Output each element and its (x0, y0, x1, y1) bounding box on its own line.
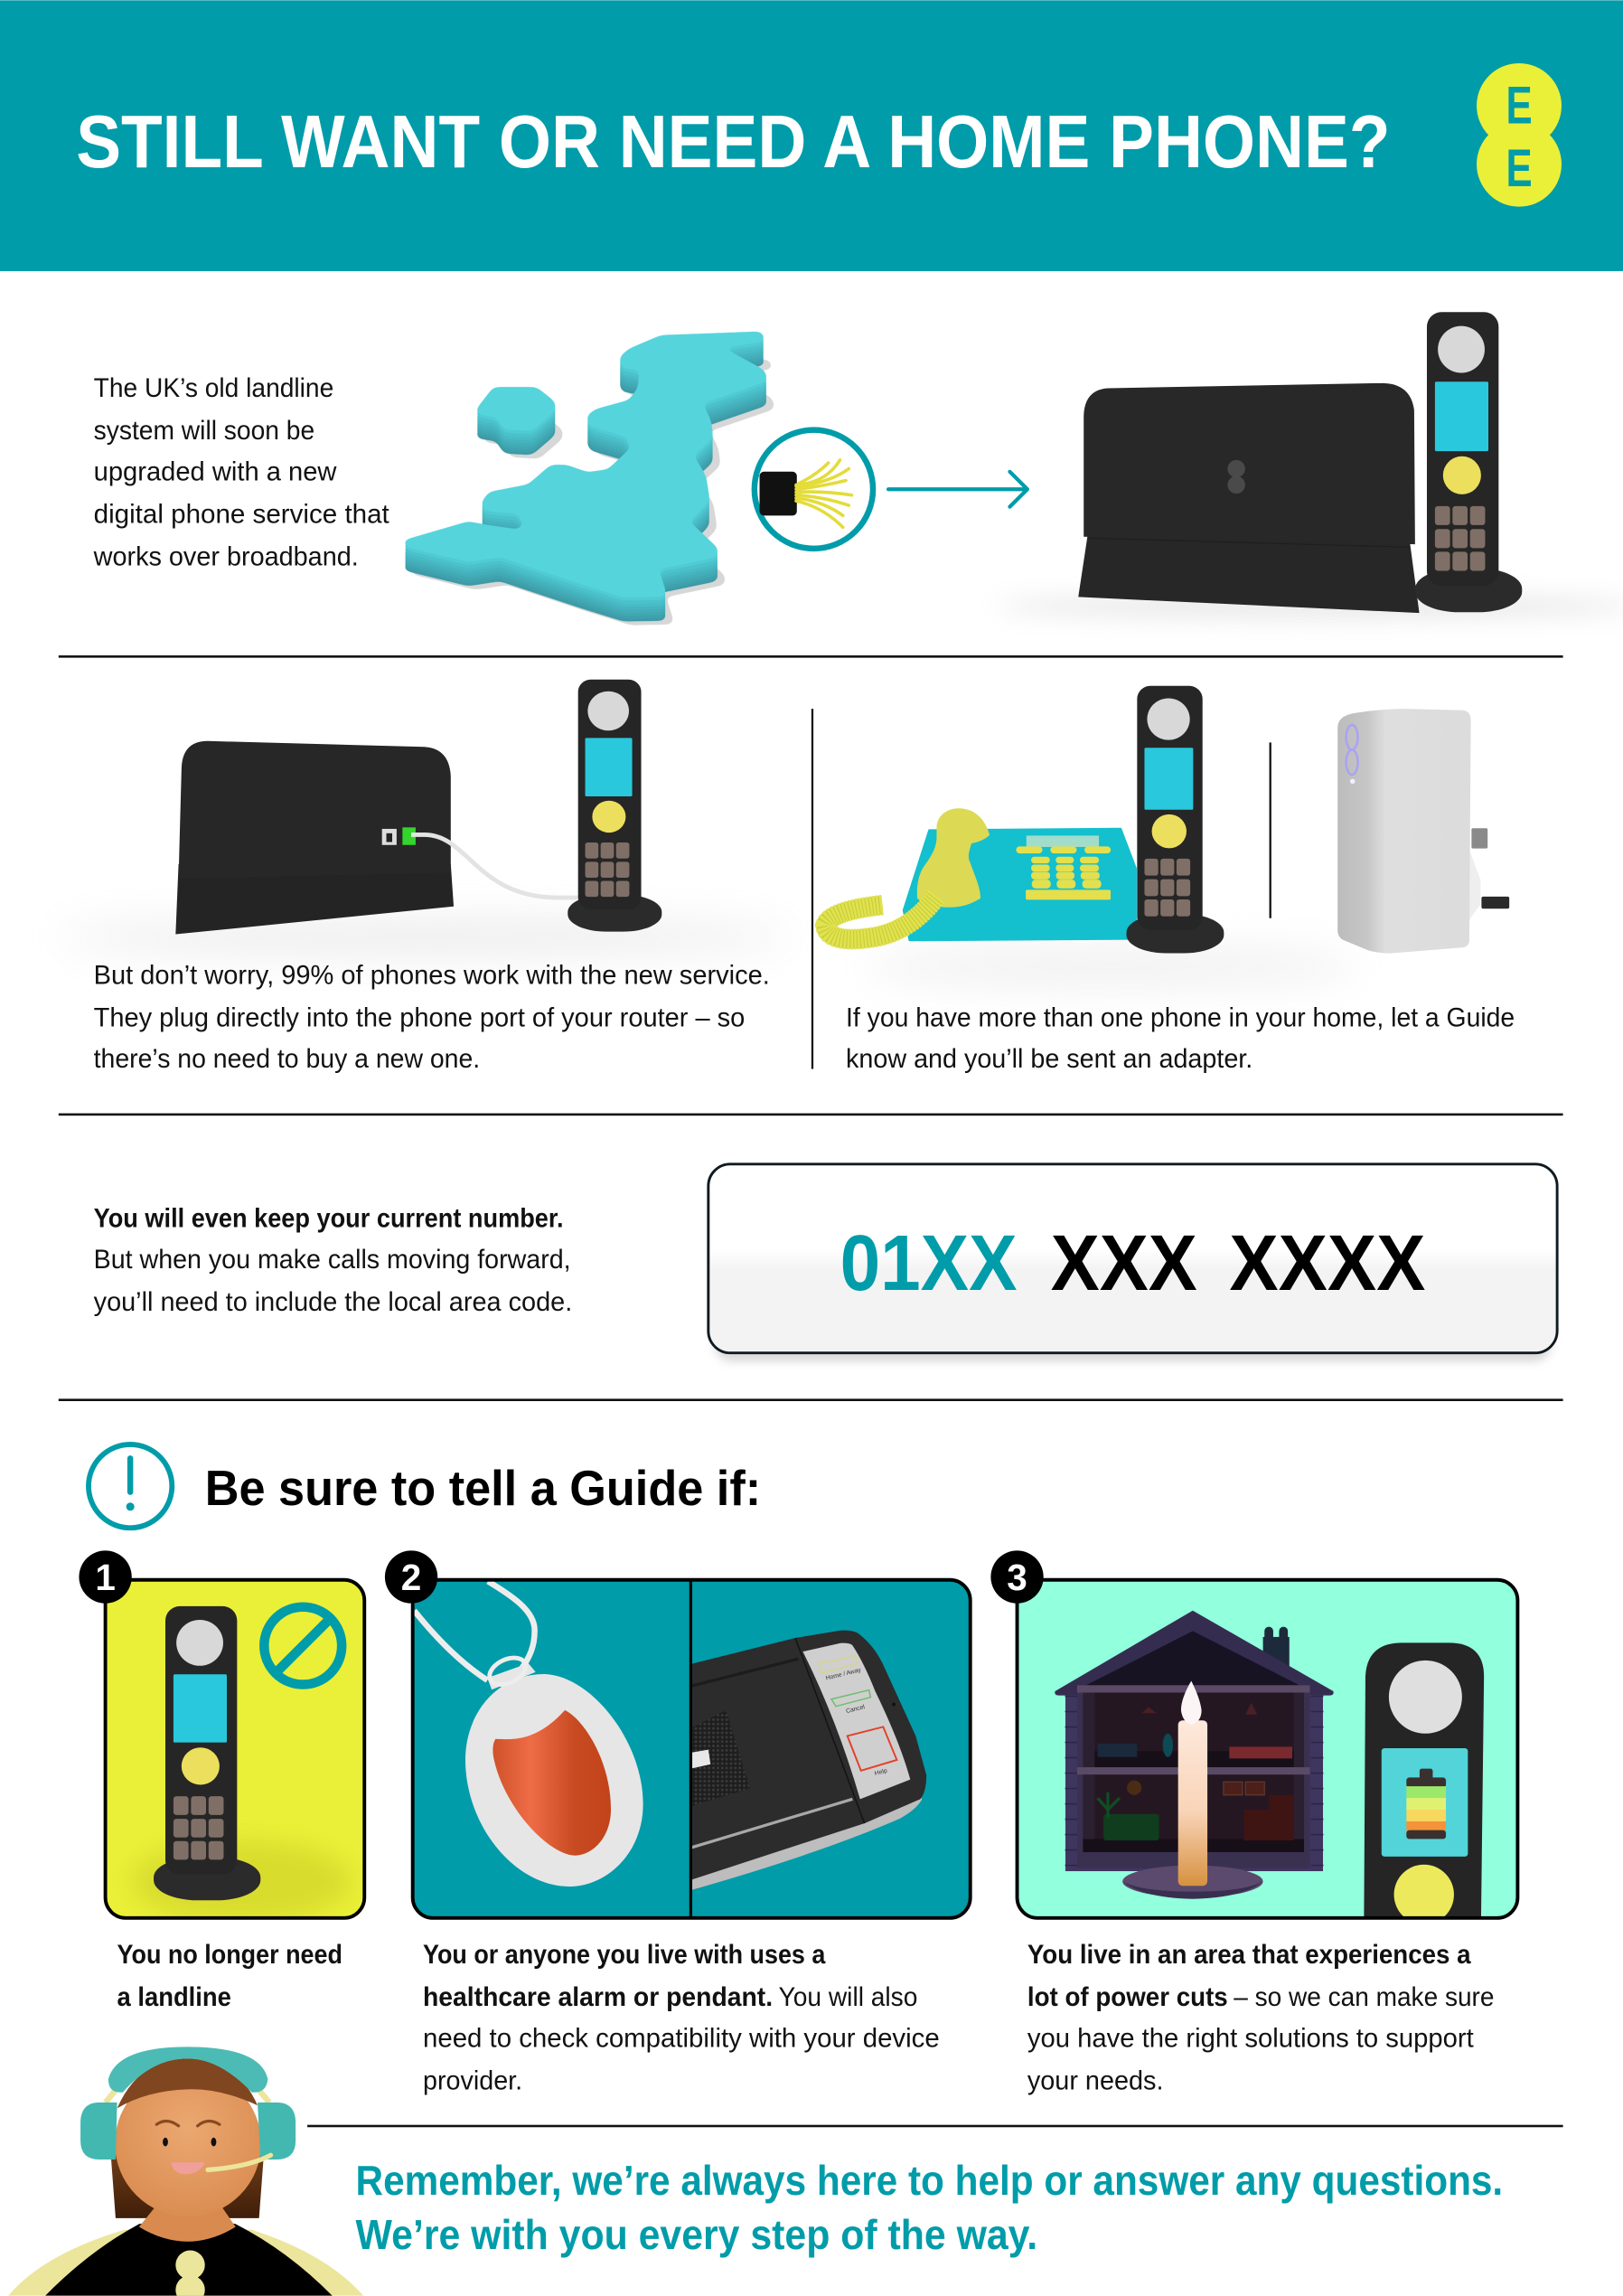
caption 3: You live in an area that experiences a (1027, 1940, 1471, 1970)
badge 1 (79, 1550, 132, 1604)
closing message: We’re with you every step of the way. (356, 2211, 1037, 2258)
big phone with battery (1364, 1642, 1484, 1924)
shirt logo (175, 2250, 205, 2296)
alarm device: Home / Away (825, 1667, 862, 1682)
adapter (1337, 709, 1509, 954)
router and phone (995, 312, 1623, 618)
microphone (208, 2155, 271, 2169)
panel: more than one phone (825, 686, 1515, 1074)
text block: phones work: They plug directly into the phone port of your router – so (94, 1003, 745, 1033)
text block: intro (93, 373, 389, 571)
panel: landline upgrade (93, 312, 1623, 624)
text block: adapter: know and you’ll be sent an adapter. (846, 1044, 1252, 1074)
phone (1127, 686, 1224, 954)
number box: XXXX (1229, 1219, 1425, 1307)
alarm device: Cancel (845, 1704, 866, 1715)
text block: adapter (846, 1003, 1515, 1074)
badge 1: 1 (95, 1557, 116, 1598)
candle (1122, 1680, 1263, 1899)
caption 3: – so we can make sure (1234, 1982, 1494, 2012)
text block: number: You will even keep your current number. (94, 1203, 563, 1233)
icon: exclamation (89, 1444, 172, 1528)
telephone (825, 808, 1136, 940)
icon: EE logo: E (1506, 76, 1533, 135)
caption 2: You will also (779, 1982, 917, 2012)
text block: phones work: But don’t worry, 99% of phones work with the new service. (94, 961, 770, 991)
headband (108, 2047, 267, 2093)
small divider (1270, 742, 1271, 918)
badge 2 (385, 1550, 437, 1604)
number box (708, 1164, 1557, 1361)
panel: phones work with new service (59, 680, 791, 1074)
text block: number: you’ll need to include the local area code. (94, 1287, 572, 1317)
divider (59, 655, 1563, 658)
face (116, 2089, 260, 2208)
caption 2 (423, 1940, 940, 2095)
caption 2: You or anyone you live with uses a (423, 1940, 826, 1970)
panel: keep your number (94, 1164, 1557, 1361)
vertical divider (812, 709, 813, 1069)
headset arms (103, 2090, 271, 2103)
text block: number: But when you make calls moving forward, (94, 1245, 571, 1275)
router with phone plugged in (59, 680, 791, 952)
neck (139, 2207, 236, 2242)
title: STILL WANT OR NEED A HOME PHONE? (76, 99, 1391, 183)
card 2: alarm or pendant (385, 1550, 971, 1918)
closing message (356, 2157, 1503, 2258)
caption 3: you have the right solutions to support (1027, 2023, 1475, 2053)
divider (307, 2125, 1563, 2127)
icon: EE logo (1477, 63, 1562, 207)
caption 3 (1027, 1940, 1494, 2095)
icon: no sign (264, 1607, 342, 1685)
section heading with alert icon (89, 1444, 761, 1528)
number box: 01XX (840, 1219, 1018, 1307)
alarm device (690, 1631, 926, 1890)
icon: UK map (402, 333, 774, 624)
icon: EE logo: E (1506, 139, 1533, 198)
hair top (117, 2058, 258, 2108)
divider (59, 1114, 1563, 1115)
text block: adapter: If you have more than one phone in your home, let a Guide (846, 1003, 1515, 1033)
shoulders (5, 2230, 366, 2296)
text block: intro: upgraded with a new (94, 457, 337, 487)
icon: fibre cable in circle (755, 430, 873, 549)
arrow (888, 472, 1027, 507)
icon: battery (1406, 1769, 1446, 1839)
card 3: power cuts (990, 1550, 1517, 1924)
alarm device: Help (874, 1768, 888, 1777)
text block: intro: digital phone service that (94, 499, 389, 529)
character: guide with headset (5, 2047, 366, 2296)
heading: Be sure to tell a Guide if: (205, 1460, 761, 1516)
house (1055, 1611, 1334, 1871)
text block: intro: The UK’s old landline (94, 373, 333, 403)
caption 3: lot of power cuts (1027, 1982, 1228, 2012)
card 1: no longer need landline (79, 1550, 364, 1923)
text block: phones work (94, 961, 770, 1074)
text block: intro: works over broadband. (93, 541, 359, 571)
badge 3: 3 (1007, 1557, 1027, 1598)
text block: phones work: there’s no need to buy a new one. (94, 1044, 480, 1074)
caption 2: need to check compatibility with your device (423, 2023, 940, 2053)
hair (111, 2153, 264, 2218)
header banner (0, 0, 1623, 271)
badge 2: 2 (401, 1557, 421, 1598)
caption 2: healthcare alarm or pendant. (423, 1982, 773, 2012)
caption 1 (117, 1940, 342, 2012)
torso (42, 2221, 335, 2296)
divider (59, 1398, 1563, 1401)
text block: number (94, 1203, 572, 1317)
caption 3: your needs. (1027, 2065, 1163, 2095)
badge 3 (990, 1550, 1044, 1604)
caption 1: a landline (117, 1982, 231, 2012)
caption 1: You no longer need (117, 1940, 342, 1970)
closing message: Remember, we’re always here to help or answer any questions. (356, 2157, 1503, 2204)
pendant (414, 1581, 643, 1887)
phone (154, 1606, 260, 1900)
facial features (156, 2122, 220, 2174)
number box: XXX (1051, 1219, 1197, 1307)
text block: intro: system will soon be (94, 416, 314, 446)
caption 2: provider. (423, 2065, 522, 2095)
ear cups (80, 2103, 296, 2160)
